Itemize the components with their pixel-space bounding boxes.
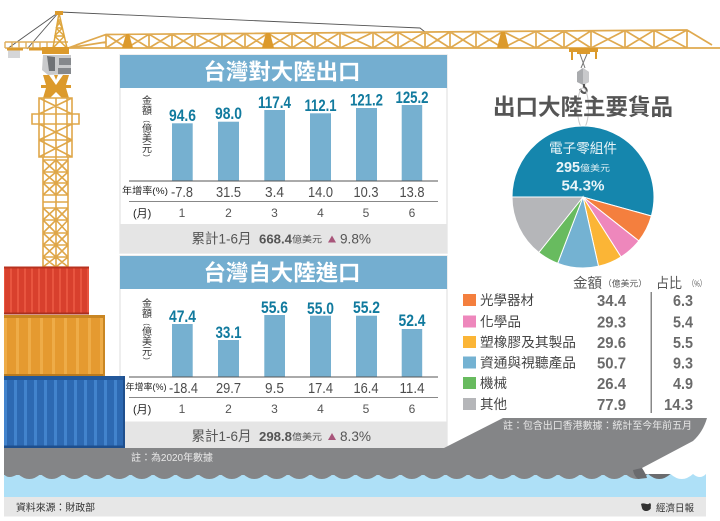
bar chart: monthly imports: 33.1 <box>216 323 242 342</box>
tower crane <box>5 11 720 267</box>
axis label: export amount: 額 <box>142 104 152 117</box>
bar chart: monthly imports: 55.0 <box>307 299 334 318</box>
footer bar <box>4 497 706 516</box>
hull waterline <box>4 474 648 479</box>
row: machinery: 機械 <box>480 376 507 391</box>
table header: 金額 <box>573 275 602 291</box>
row: optical: 6.3 <box>673 293 693 310</box>
row: ICT: 50.7 <box>597 356 626 372</box>
container: orange <box>4 315 105 376</box>
month row: export <box>133 206 416 220</box>
bar chart: monthly imports: 52.4 <box>398 311 426 330</box>
month row: import <box>133 402 416 416</box>
pie label <box>549 141 617 194</box>
bar chart: monthly imports: 55.6 <box>261 298 288 317</box>
growth rate row: export <box>122 185 438 202</box>
row: other: 其他 <box>480 397 507 412</box>
growth rate row: import: 9.5 <box>265 381 284 397</box>
growth rate row: export: 3.4 <box>265 185 284 201</box>
row: optical <box>463 293 693 310</box>
table header <box>573 275 706 291</box>
water <box>4 474 706 497</box>
growth rate row: import: 年增率(%) <box>126 381 166 392</box>
growth rate row: import: 16.4 <box>354 381 378 397</box>
month row: export: 5 <box>363 206 370 220</box>
growth rate row: export: 10.3 <box>354 185 378 201</box>
row: ICT <box>463 354 693 372</box>
axis label: export amount: 金 <box>142 94 152 107</box>
cumulative band: import: 8.3% <box>340 428 371 444</box>
crane support cable <box>7 12 425 49</box>
ship hull <box>4 418 707 479</box>
axis label: export amount: 億 <box>142 122 152 135</box>
growth rate row: export: 31.5 <box>216 185 241 201</box>
heading: export: 台灣對大陸出口 <box>204 60 360 84</box>
cumulative band: export <box>120 224 447 253</box>
axis label: export amount: ( <box>142 120 150 123</box>
source: 資料來源：財政部 <box>16 501 95 514</box>
pie label: 295 <box>556 159 580 176</box>
growth rate row: export: -7.8 <box>171 185 193 201</box>
crane slewing unit <box>41 47 71 98</box>
growth rate row: export: 年增率(%) <box>122 185 168 197</box>
axis label: import amount: ) <box>142 357 150 360</box>
row: optical: 34.4 <box>597 293 626 310</box>
row: plastics: 塑橡膠及其製品 <box>480 334 576 350</box>
row: machinery <box>463 376 693 393</box>
axis label: import amount: 億 <box>142 325 152 338</box>
month row: export: 2 <box>225 206 232 220</box>
month row: export: 6 <box>409 206 416 220</box>
axis label: export amount <box>142 94 152 157</box>
row: other: 77.9 <box>597 397 626 414</box>
row: chemicals: 化學品 <box>480 314 521 330</box>
axis label: import amount: ( <box>142 323 150 326</box>
crane counter jib <box>5 42 68 58</box>
month row: export: 4 <box>317 206 324 220</box>
row: optical: 光學器材 <box>480 293 534 308</box>
month row: export: (月) <box>133 208 151 220</box>
axis label: import amount: 美 <box>142 335 152 348</box>
bar chart: monthly exports: 94.6 <box>169 106 196 125</box>
month row: import: 1 <box>179 402 186 416</box>
crane tower <box>32 98 79 267</box>
month row: import: 2 <box>225 402 232 416</box>
cumulative band: export: 累計1-6月 <box>192 230 252 246</box>
pie label: 54.3% <box>562 178 604 194</box>
growth rate row: import: -18.4 <box>169 381 198 397</box>
axis label: export amount: 元 <box>142 144 152 155</box>
table: export goods <box>463 275 706 414</box>
crane mast peak <box>55 11 63 15</box>
note: export scope: 註：包含出口香港數據：統計至今年前五月 <box>503 419 692 432</box>
pie label: 億美元 <box>580 163 611 173</box>
growth rate row: export: 13.8 <box>400 185 424 201</box>
axis label: export amount: ) <box>142 154 150 157</box>
ship bow bulb <box>633 468 670 479</box>
month row: export: 1 <box>179 206 186 220</box>
growth rate row: import: 11.4 <box>400 381 424 397</box>
containers stack <box>4 266 125 448</box>
table header: 占比 <box>656 275 682 291</box>
growth rate row: import: 17.4 <box>308 381 333 397</box>
month row: import: 3 <box>271 402 278 416</box>
icon: newspaper logo <box>641 503 651 511</box>
table header: （億美元） <box>603 278 647 288</box>
bar chart: monthly exports: 112.1 <box>304 96 336 115</box>
crane trolley and hook <box>569 48 598 128</box>
cumulative band: import: 億美元 <box>292 431 322 442</box>
growth rate row: import: 29.7 <box>216 381 241 397</box>
heading: export <box>120 55 447 88</box>
pie title: 出口大陸主要貨品 <box>493 95 673 120</box>
heading: import: 台灣自大陸進口 <box>204 260 360 286</box>
table header: （%） <box>688 278 706 288</box>
row: other: 14.3 <box>664 397 693 414</box>
crane jib truss <box>68 30 720 48</box>
container: red <box>4 266 89 314</box>
cumulative band: import: 累計1-6月 <box>192 428 252 444</box>
foam waves at bow <box>670 473 706 479</box>
bar chart: monthly exports: 125.2 <box>396 88 428 107</box>
bar chart: monthly exports <box>129 88 438 182</box>
row: plastics <box>463 334 693 352</box>
panel: export to mainland <box>120 55 447 253</box>
month row: import: 5 <box>363 402 370 416</box>
cumulative band: export: 668.4 <box>259 232 293 246</box>
axis label: import amount: 金 <box>142 297 152 310</box>
row: chemicals <box>463 314 693 332</box>
pie label: 電子零組件 <box>549 141 617 156</box>
growth rate row: export: 14.0 <box>308 185 333 201</box>
axis label: import amount: 元 <box>142 347 152 358</box>
cumulative band: import <box>120 422 447 448</box>
growth rate row: import <box>126 381 438 398</box>
axis label: export amount: 美 <box>142 132 152 145</box>
logo text: 經濟日報 <box>656 502 694 514</box>
row: machinery: 4.9 <box>673 376 693 393</box>
bar chart: monthly imports: 55.2 <box>353 298 380 317</box>
bar chart: monthly imports: 47.4 <box>169 307 196 326</box>
axis label: import amount <box>142 297 152 360</box>
month row: import: (月) <box>133 404 151 416</box>
row: plastics: 5.5 <box>673 335 693 352</box>
month row: import: 6 <box>409 402 416 416</box>
cumulative band: export: 億美元 <box>292 234 322 244</box>
heading: import <box>120 256 447 289</box>
row: other <box>463 397 693 414</box>
month row: import: 4 <box>317 402 324 416</box>
row: chemicals: 5.4 <box>673 314 693 332</box>
row: chemicals: 29.3 <box>597 314 626 332</box>
crane jib wedges <box>122 32 509 48</box>
bar chart: monthly exports: 98.0 <box>215 104 242 123</box>
crane cabin <box>42 55 71 75</box>
table divider <box>650 292 652 413</box>
bar chart: monthly exports: 117.4 <box>258 93 291 112</box>
month row: export: 3 <box>271 206 278 220</box>
axis label: import amount: 額 <box>142 307 152 320</box>
note: 2020 data: 註：為2020年數據 <box>131 451 213 464</box>
panel: import from mainland <box>120 256 447 448</box>
bar chart: monthly exports: 121.2 <box>350 90 383 110</box>
crane mast top <box>53 13 67 48</box>
row: ICT: 資通與視聽產品 <box>480 354 576 370</box>
row: ICT: 9.3 <box>673 356 693 372</box>
row: machinery: 26.4 <box>597 376 626 393</box>
cumulative band: import: 298.8 <box>259 429 292 444</box>
cumulative band: export: 9.8% <box>340 230 371 246</box>
row: plastics: 29.6 <box>597 335 626 352</box>
pie chart: main export goods <box>512 126 654 268</box>
bar chart: monthly imports <box>129 298 438 378</box>
container: blue <box>4 376 125 448</box>
